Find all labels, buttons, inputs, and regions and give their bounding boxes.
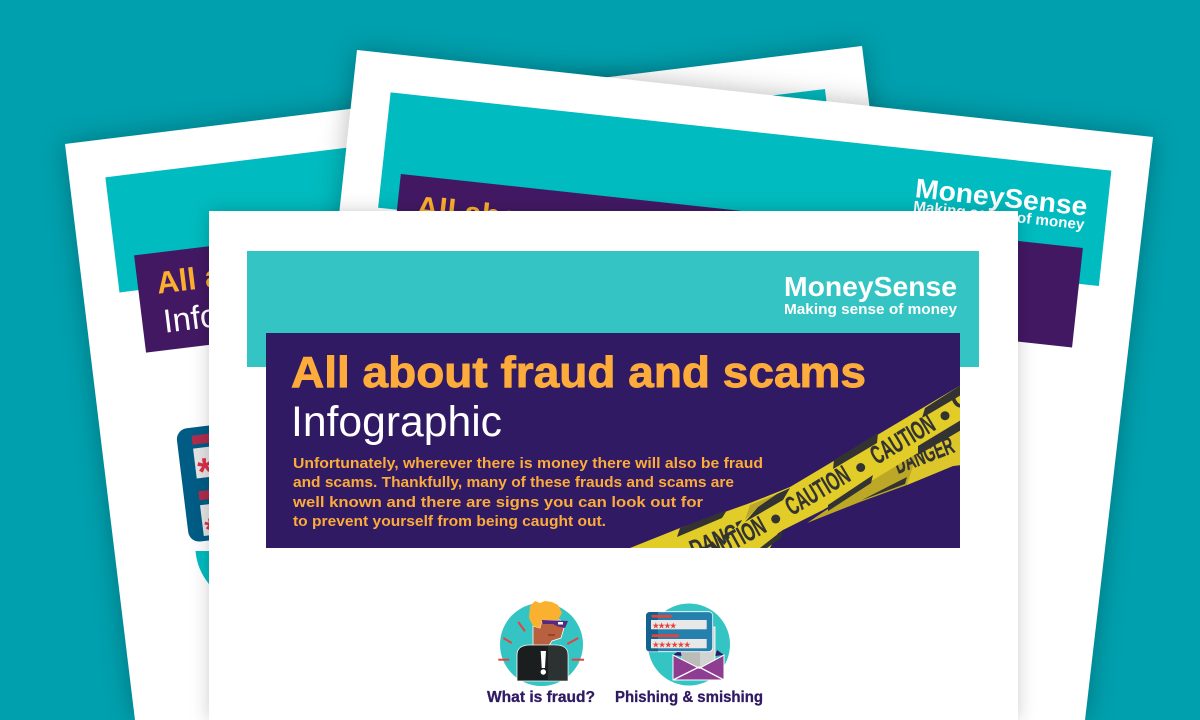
upper tape main: CAUTION bbox=[693, 510, 771, 571]
intro text: to prevent yourself from being caught out. bbox=[293, 513, 606, 530]
lower tape: DANGER bbox=[890, 431, 958, 480]
icon: password card: * bbox=[196, 451, 216, 494]
back left sheet paper bbox=[65, 46, 945, 720]
upper tape left end: DANGE bbox=[686, 514, 754, 564]
right sheet logo: MoneySense bbox=[914, 173, 1089, 222]
upper tape left end bbox=[630, 503, 778, 548]
left sheet purple banner bbox=[134, 171, 831, 353]
icon: phishing card and envelope: ★★★★★★ bbox=[652, 640, 691, 650]
title: All about fraud and scams bbox=[291, 348, 866, 397]
subtitle: Infographic bbox=[291, 398, 502, 446]
right sheet teal band bbox=[378, 92, 1111, 286]
left sheet teal band bbox=[105, 89, 839, 292]
left sheet subtitle: Infographic bbox=[161, 283, 328, 340]
upper tape main bbox=[702, 386, 960, 548]
upper tape main: C bbox=[945, 381, 976, 416]
left sheet title: All about bbox=[155, 250, 290, 301]
panel: back right sheet bbox=[284, 50, 1153, 720]
intro text bbox=[292, 455, 763, 530]
upper tape main: CAUTION bbox=[865, 408, 940, 470]
label: what is fraud: What is fraud? bbox=[487, 689, 595, 706]
logo: MoneySense bbox=[784, 271, 957, 302]
icon: password card: * bbox=[203, 512, 219, 547]
icon: fraudster bbox=[498, 601, 584, 686]
back right sheet paper bbox=[284, 50, 1153, 720]
icon: teal circle under card bbox=[196, 551, 225, 584]
icon: phishing card and envelope: ★★★★ bbox=[652, 621, 677, 631]
intro text: well known and there are signs you can look out for bbox=[292, 494, 703, 511]
front sheet paper bbox=[209, 211, 1018, 720]
icon: phishing card and envelope bbox=[646, 604, 730, 686]
intro text: Unfortunately, wherever there is money there will also be fraud bbox=[293, 455, 763, 472]
purple banner bbox=[266, 333, 960, 548]
upper tape main: CAUTION bbox=[780, 459, 855, 521]
right sheet tagline: Making sense of money bbox=[912, 198, 1086, 234]
back left sheet header and icon bbox=[105, 89, 871, 554]
back right sheet header bbox=[371, 92, 1111, 350]
right sheet title: All about bbox=[415, 189, 550, 239]
header band bbox=[247, 251, 979, 367]
icon: password card bbox=[176, 411, 339, 549]
caution tape bbox=[630, 386, 960, 548]
panel: front sheet bbox=[209, 211, 1018, 720]
intro text: and scams. Thankfully, many of these frauds and scams are bbox=[293, 474, 734, 491]
panel: back left sheet bbox=[65, 46, 945, 720]
lower tape bbox=[807, 430, 960, 523]
right sheet purple banner bbox=[390, 174, 1083, 347]
tagline: Making sense of money bbox=[784, 301, 958, 318]
label: phishing and smishing: Phishing & smishing bbox=[615, 689, 763, 706]
